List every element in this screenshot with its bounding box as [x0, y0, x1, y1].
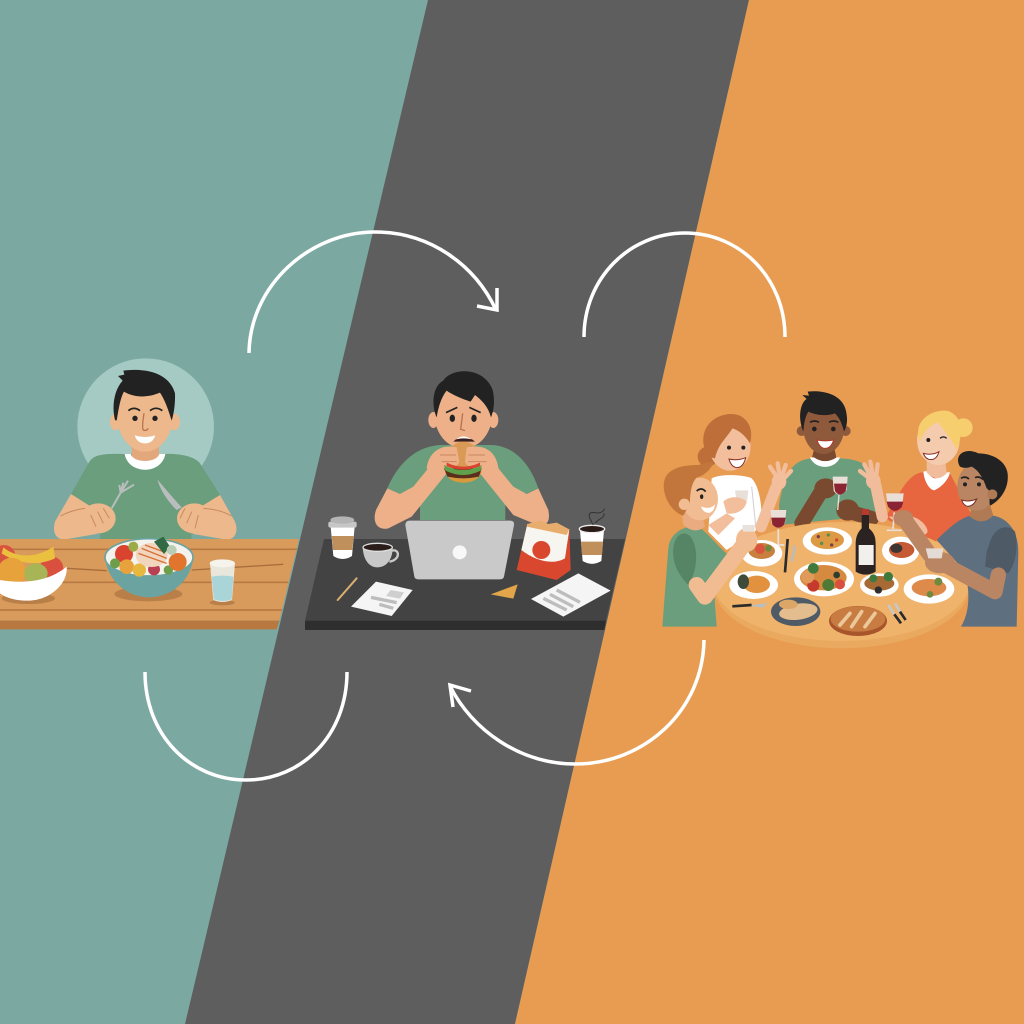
arms	[802, 493, 872, 523]
laptop	[405, 521, 514, 579]
her wine glass and hand	[735, 490, 748, 502]
woman with blonde hair	[860, 411, 973, 542]
raised hand left	[761, 463, 791, 527]
cycle arrow: social to stressed	[450, 640, 704, 764]
panel: charcoal background	[185, 0, 749, 1024]
woman with red hair	[698, 414, 762, 550]
raised hand right	[860, 462, 882, 517]
halo circle	[77, 358, 214, 495]
fruit bowl	[0, 545, 67, 604]
fork	[112, 481, 134, 508]
arms and hands	[905, 520, 998, 592]
plate: grains	[803, 527, 852, 555]
panel: teal background	[0, 0, 428, 1024]
left hand	[427, 446, 459, 475]
cycle arrow: healthy to stressed	[249, 232, 497, 353]
man eating a burger	[375, 371, 549, 529]
burger fillings and bottom bun	[444, 463, 482, 483]
coffee mug	[363, 543, 398, 567]
boy in green shirt	[662, 462, 757, 627]
right hand	[465, 446, 498, 475]
plate: left	[741, 540, 782, 567]
paper right	[531, 573, 611, 617]
burger top bun	[447, 442, 480, 467]
centre platter	[794, 562, 854, 596]
knife	[157, 479, 182, 510]
arm and hand	[697, 545, 743, 597]
wine glass right	[886, 493, 904, 530]
wine bottle	[856, 509, 876, 575]
wooden stirrer	[338, 578, 357, 600]
coffee cup left	[328, 516, 357, 559]
wooden table	[0, 539, 299, 629]
coffee cup right with steam	[579, 508, 605, 564]
dinner table	[713, 522, 970, 648]
scene: stressed desk meal	[305, 371, 625, 630]
water glass	[210, 559, 235, 605]
panel: orange background	[515, 0, 1024, 1024]
wine glass left	[771, 510, 786, 545]
man in slate shirt	[893, 451, 1018, 627]
plate: vegetables	[860, 572, 899, 597]
cycle arc: stressed to healthy	[145, 672, 347, 780]
fish platter	[771, 597, 820, 626]
bread loaf	[829, 606, 887, 636]
man eating healthily	[54, 370, 236, 539]
fast food bag	[517, 521, 571, 580]
scene: group dinner	[662, 391, 1018, 648]
cycle arc: stressed to social	[584, 233, 785, 337]
plate: right	[904, 574, 954, 604]
wine glass	[833, 477, 848, 510]
salad bowl	[105, 537, 193, 601]
chip	[491, 584, 518, 599]
scene: healthy meal alone	[0, 358, 299, 629]
plate: aubergine	[882, 537, 919, 565]
plate: chickpeas	[729, 571, 778, 599]
man in green shirt	[779, 391, 882, 525]
paper left	[351, 582, 413, 616]
cutlery	[732, 539, 906, 623]
desk	[305, 539, 625, 630]
